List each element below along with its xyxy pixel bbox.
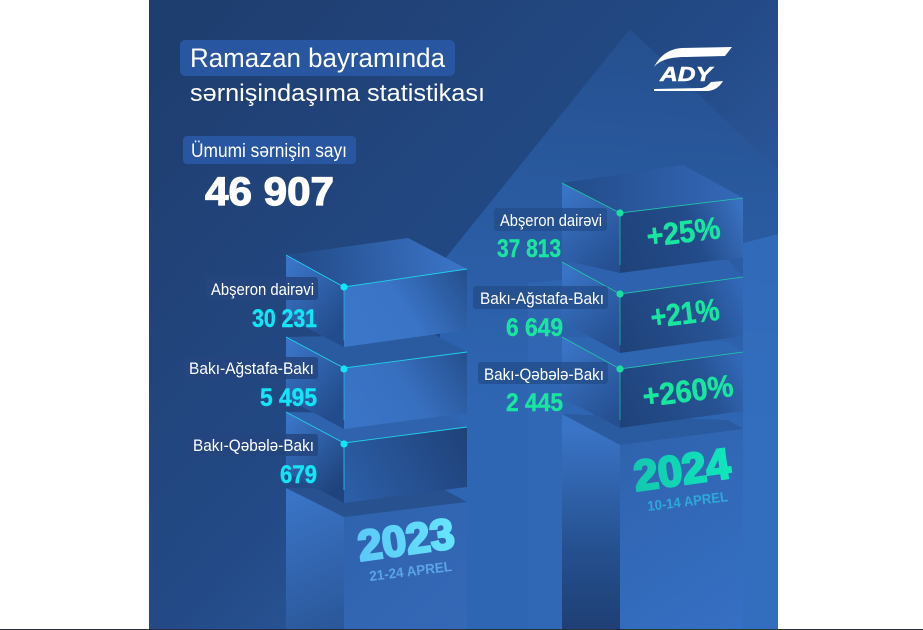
label: Abşeron dairəvi 2023: 30 231 <box>252 305 317 333</box>
base 2024 <box>562 414 743 630</box>
label: Bakı-Qəbələ-Bakı 2024: Bakı-Qəbələ-Bakı <box>484 365 604 384</box>
label: Bakı-Qəbələ-Bakı 2023: 679 <box>280 461 317 489</box>
date: 10-14 APREL: 10-14 APREL <box>646 488 729 514</box>
label: Bakı-Ağstafa-Bakı 2024: Bakı-Ağstafa-Bakı <box>480 289 604 308</box>
percent: +25%: +25% <box>645 210 722 254</box>
label: Abşeron dairəvi 2024: Abşeron dairəvi <box>500 211 602 230</box>
dots: 2023 <box>340 283 348 448</box>
percent: +260%: +260% <box>641 368 735 414</box>
labels: 2024 <box>473 208 608 417</box>
label: Abşeron dairəvi 2023 <box>205 277 318 333</box>
logo: ADY: ADY <box>659 64 714 86</box>
dots: 2024 <box>616 209 624 373</box>
label: Bakı-Ağstafa-Bakı 2023 <box>184 357 318 412</box>
label: Bakı-Qəbələ-Bakı 2023: Bakı-Qəbələ-Bakı <box>193 436 314 455</box>
title: Ramazan bayramında <box>190 43 446 73</box>
label: Abşeron dairəvi 2024 <box>494 208 607 263</box>
panel: background <box>149 0 778 630</box>
labels: 2023 <box>184 277 318 489</box>
block 1 2024 <box>562 165 743 273</box>
label: Bakı-Ağstafa-Bakı 2024: 6 649 <box>506 314 563 342</box>
title: sərnişindaşıma statistikası <box>190 80 485 107</box>
total passengers: 46 907 <box>205 170 334 214</box>
date: 21-24 APREL: 21-24 APREL <box>368 558 453 584</box>
label: Abşeron dairəvi 2023: Abşeron dairəvi <box>211 280 314 299</box>
total passengers <box>183 136 356 214</box>
block 1 2023 <box>286 238 467 347</box>
block 3 2023 <box>286 412 467 503</box>
logo: ADY <box>654 47 732 91</box>
label: Bakı-Qəbələ-Bakı 2024: 2 445 <box>506 389 563 417</box>
label: Abşeron dairəvi 2024: 37 813 <box>497 235 561 263</box>
year: 2024: 2024 <box>631 440 734 501</box>
label: Bakı-Ağstafa-Bakı 2023: Bakı-Ağstafa-Bakı <box>189 359 314 378</box>
block 2 2024 <box>562 260 743 353</box>
label: Bakı-Ağstafa-Bakı 2023: 5 495 <box>260 384 317 412</box>
title <box>180 40 485 107</box>
block 2 2023 <box>286 334 467 429</box>
percent: +21%: +21% <box>649 292 721 335</box>
block 3 2024 <box>562 337 743 428</box>
label: Bakı-Qəbələ-Bakı 2023 <box>188 434 318 489</box>
label: Bakı-Ağstafa-Bakı 2024 <box>473 286 608 342</box>
total passengers: Ümumi sərnişin sayı <box>191 141 347 162</box>
tower: 2023 <box>286 238 467 630</box>
background arrow <box>440 29 778 630</box>
tower: 2024 <box>562 165 743 630</box>
label: Bakı-Qəbələ-Bakı 2024 <box>478 362 608 417</box>
base 2023 <box>286 488 467 630</box>
year: 2023: 2023 <box>355 510 457 571</box>
